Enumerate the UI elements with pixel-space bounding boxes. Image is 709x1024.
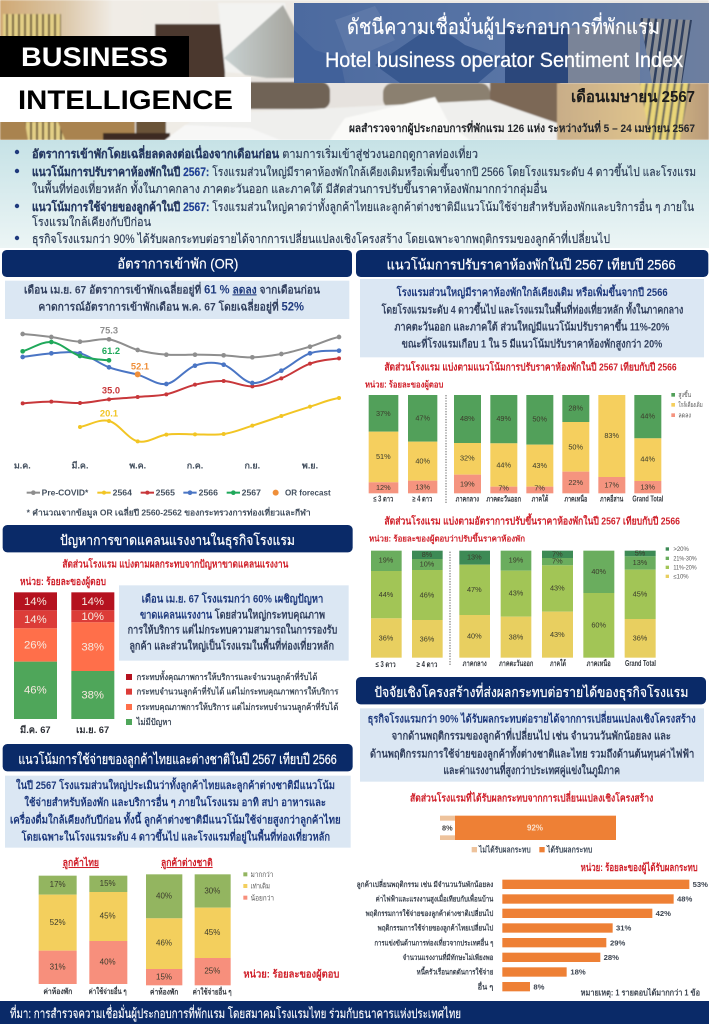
bar chart: structural factors: พฤติกรรมการใช้จ่ายของลูกค้าไทยเปลี่ยนไป (378, 922, 493, 934)
spending legend (243, 870, 274, 902)
stacked bars: increase rate: 45% (633, 589, 648, 598)
labor legend (126, 670, 338, 728)
room price summary box (360, 279, 704, 357)
stacked bars: spending: 40% (100, 958, 116, 967)
OR summary box (5, 281, 349, 319)
rate legend (666, 547, 697, 580)
impact legend: ไม่ได้รับผลกระทบ (478, 845, 531, 855)
stacked bars: increase rate: 10% (420, 560, 435, 569)
stacked bars: increase rate: 40% (591, 567, 606, 576)
x axis months: มี.ค. (71, 461, 88, 471)
stacked bars: price trend: ≥ 4 ดาว (412, 495, 433, 504)
stacked bars: increase rate: 38% (509, 632, 524, 641)
label: foreign customers: ลูกค้าต่างชาติ (161, 857, 213, 870)
heading: OR: อัตราการเข้าพัก (OR) (117, 256, 238, 272)
stacked bars: price trend: 44% (640, 411, 655, 420)
stacked bars: price trend: 49% (496, 414, 511, 423)
stacked bars: labor shortage: 14% (24, 596, 47, 608)
line chart: occupancy by year: 52.1 (131, 362, 149, 372)
label: Thai customers: ลูกค้าไทย (63, 856, 99, 870)
price trend legend (671, 390, 703, 419)
stacked bars: spending: 25% (204, 967, 220, 976)
stacked bars: price trend: 50% (568, 442, 583, 451)
structural summary box: และค่าแรงงานที่สูงกว่าประเทศคู่แข่งในภูมิภาค (443, 762, 620, 778)
footer source: ที่มา: การสำรวจความเชื่อมั่นผู้ประกอบการที่พักแรม โดยสมาคมโรงแรมไทย ร่วมกับธนาคารแห่งประเทศไทย (10, 1005, 461, 1022)
header title panel: Hotel business operator Sentiment Index (325, 49, 683, 72)
stacked bars: increase rate: 36% (379, 633, 394, 642)
heading: room price: แนวโน้มการปรับราคาห้องพักในปี 2567 เทียบปี 2566 (387, 256, 676, 272)
spending legend: เท่าเดิม (251, 882, 270, 891)
stacked bars: increase rate: 13% (467, 552, 482, 561)
OR footnote: * คำนวณจากข้อมูล OR เฉลี่ยปี 2560-2562 ของกระทรวงการท่องเที่ยวและกีฬา (27, 506, 311, 519)
stacked bars: labor shortage: 46% (24, 684, 47, 696)
OR legend: 2566 (199, 488, 218, 498)
x axis months: ก.ค. (187, 461, 203, 471)
stacked bars: increase rate: 8% (422, 550, 433, 559)
stacked bar: 8% vs 92%: 92% (527, 823, 543, 832)
bar chart: structural factors: ค่าไฟฟ้าและแรงงานสูงเมื่อเทียบกับเพื่อนบ้าน (376, 893, 494, 905)
spending summary box: ใช้จ่ายสำหรับห้องพัก และบริการอื่น ๆ ภายในโรงแรม อาทิ สปา อาหารและ (24, 794, 326, 809)
rate legend: 11%-20% (673, 565, 697, 571)
x axis months (14, 461, 318, 471)
bar chart: structural factors: 18% (570, 968, 586, 977)
stacked bars: labor shortage: 14% (81, 596, 104, 608)
key points summary: โรงแรมใกล้เคียงกับปีก่อน (32, 215, 151, 229)
stacked bars: increase rate: ≤ 3 ดาว (376, 660, 396, 669)
stacked bars: spending: 46% (156, 939, 172, 948)
bar chart: structural factors: ลูกค้าเปลี่ยนพฤติกรรม เช่น มีจำนวนวันพักน้อยลง (357, 878, 494, 890)
bar chart: structural factors: จำนวนแรงงานที่มีทักษะไม่เพียงพอ (403, 951, 494, 962)
bar chart: structural factors: อื่น ๆ (477, 980, 493, 991)
stacked bars: spending: ค่าห้องพัก (43, 986, 72, 996)
bar chart: structural factors: 53% (693, 880, 708, 889)
spending summary box: โดยเฉพาะในโรงแรมระดับ 4 ดาวขึ้นไป และโรงแรมที่อยู่ในพื้นที่ท่องเที่ยวหลัก (21, 828, 330, 844)
key points summary: ธุรกิจโรงแรมกว่า 90% ได้รับผลกระทบต่อรายได้จากการเปลี่ยนแปลงเชิงโครงสร้าง โดยเฉพาะจากพฤติกรรมของลูกค้าที่เปลี่ยนไป (32, 230, 610, 247)
stacked bars: increase rate: 7% (552, 550, 563, 559)
OR legend: 2564 (113, 488, 132, 498)
stacked bars: price trend: 44% (496, 460, 511, 469)
stacked bars: price trend: 13% (415, 482, 430, 491)
bar chart: structural factors: หนี้ครัวเรือนกดดันการใช้จ่าย (417, 966, 493, 977)
bar chart: structural factors: 48% (677, 895, 693, 904)
x axis months: พ.ย. (302, 461, 318, 471)
panel: occupancy rate (2, 250, 352, 519)
stacked bars: spending: 30% (204, 886, 220, 895)
stacked bars: price trend: 48% (460, 414, 475, 423)
stacked bars: price trend: ภาคกลาง (456, 495, 479, 504)
labor callout: ลูกค้า และส่วนใหญ่เป็นโรงแรมในพื้นที่ท่องเที่ยวหลัก (129, 637, 334, 653)
stacked bars: labor shortage: 26% (24, 639, 47, 651)
Business Intelligence logo: INTELLIGENCE (18, 85, 233, 115)
stacked bars: increase rate: ภาคเหนือ (587, 658, 611, 668)
stacked bars: increase rate: 19% (379, 556, 394, 565)
stacked bars: price trend: 13% (640, 483, 655, 492)
stacked bars: increase rate (371, 548, 656, 669)
Business Intelligence logo (0, 36, 251, 122)
stacked bars: price trend: 28% (568, 404, 583, 413)
stacked bars: price trend: 43% (532, 461, 547, 470)
labor callout: การให้บริการ แต่ไม่กระทบความสามารถในการรองรับ (128, 623, 337, 637)
stacked bars: price trend: 7% (534, 484, 545, 493)
bar chart: structural factors: การแข่งขันด้านการท่องเที่ยวจากประเทศอื่น ๆ (374, 936, 493, 947)
stacked bars: spending: ค่าใช้จ่ายอื่น ๆ (89, 985, 127, 996)
bar chart: structural factors (357, 878, 708, 991)
spending summary box: ในปี 2567 โรงแรมส่วนใหญ่ประเมินว่าทั้งลูกค้าไทยและลูกค้าต่างชาติมีแนวโน้ม (16, 777, 335, 793)
stacked bars: price trend: 47% (415, 414, 430, 423)
bar chart: structural factors: 42% (656, 909, 671, 918)
room price summary box: โรงแรมส่วนใหญ่มีราคาห้องพักใกล้เคียงเดิม หรือเพิ่มขึ้นจากปี 2566 (396, 284, 668, 299)
stacked bars: price trend: ภาคเหนือ (564, 494, 587, 504)
stacked bars: labor shortage: เม.ย. 67 (76, 725, 109, 735)
stacked bar: 8% vs 92% (440, 816, 616, 840)
heading: spending (3, 744, 353, 771)
line chart: occupancy by year (20, 325, 341, 443)
labor unit: หน่วย: ร้อยละของผู้ตอบ (20, 576, 106, 589)
stacked bars: price trend: 19% (460, 479, 475, 488)
OR summary box: เดือน เม.ย. 67 อัตราการเข้าพักเฉลี่ยอยู่ที่ 61 % ลดลง จากเดือนก่อน (24, 281, 320, 297)
spending summary box (5, 776, 351, 848)
stacked bars: price trend: 12% (376, 483, 391, 492)
heading: structural factors (356, 677, 706, 704)
x axis months: ม.ค. (14, 461, 31, 471)
stacked bars: price trend: ภาคอีสาน (600, 494, 624, 504)
stacked bars: increase rate: 19% (509, 555, 524, 564)
stacked bars: price trend: 17% (604, 480, 619, 489)
OR summary box: คาดการณ์อัตราการเข้าพักเดือน พ.ค. 67 โดยเฉลี่ยอยู่ที่ 52% (38, 299, 304, 315)
heading: spending: แนวโน้มการใช้จ่ายของลูกค้าไทยและต่างชาติในปี 2567 เทียบปี 2566 (18, 751, 337, 768)
labor legend: ไม่มีปัญหา (136, 716, 172, 728)
stacked bars: price trend: 22% (568, 478, 583, 487)
stacked bars: increase rate: 43% (509, 589, 524, 598)
panel: structural impact charts (357, 791, 708, 998)
x axis months: พ.ค. (129, 461, 146, 471)
impact legend (472, 845, 592, 855)
heading: labor shortage (3, 525, 353, 552)
stacked bars: increase rate: ≥ 4 ดาว (417, 660, 438, 669)
rate legend: ≤10% (673, 574, 689, 580)
impact legend: ได้รับผลกระทบ (546, 845, 592, 855)
bar chart: structural factors: พฤติกรรมการใช้จ่ายของลูกค้าต่างชาติเปลี่ยนไป (366, 907, 493, 919)
stacked bars: price trend: 32% (460, 454, 475, 463)
rate legend: 21%-30% (673, 556, 697, 562)
OR legend: 2565 (156, 488, 175, 498)
stacked bars: spending: 40% (156, 891, 172, 900)
panel: price increase rate (356, 512, 706, 782)
rate unit: หน่วย: ร้อยละของผู้ตอบว่าปรับขึ้นราคาห้องพัก (369, 532, 525, 545)
line chart: occupancy by year: 35.0 (102, 385, 120, 395)
stacked bars: increase rate: 44% (379, 590, 394, 599)
stacked bars: increase rate: 40% (467, 632, 482, 641)
labor callout: เดือน เม.ย. 67 โรงแรมกว่า 60% เผชิญปัญหา (142, 592, 323, 606)
x axis months: ก.ย. (244, 461, 260, 471)
stacked bars: increase rate: ภาคกลาง (463, 659, 487, 668)
stacked bars: price trend: Grand Total (632, 495, 663, 504)
OR legend: Pre-COVID* (42, 488, 89, 498)
stacked bars: price trend: 51% (376, 452, 391, 461)
heading: room price (356, 250, 708, 277)
stacked bars: spending: ค่าห้องพัก (150, 987, 178, 997)
heading: OR (2, 250, 352, 277)
spending legend: น้อยกว่า (251, 893, 274, 902)
room price summary box: ขณะที่โรงแรมเกือบ 1 ใน 5 มีแนวโน้มปรับราคาห้องพักสูงกว่า 20% (402, 336, 663, 352)
panel: customer spending (3, 744, 353, 997)
rate legend: >20% (673, 547, 689, 553)
stacked bars: labor shortage: มี.ค. 67 (20, 724, 51, 735)
stacked bars: increase rate: ภาคตะวันออก (499, 659, 533, 668)
stacked bars: price trend (369, 395, 663, 504)
room price unit: หน่วย: ร้อยละของผู้ตอบ (365, 380, 444, 391)
OR legend: OR forecast (285, 488, 331, 498)
labor legend: กระทบคุณภาพการให้บริการ แต่ไม่กระทบจำนวนลูกค้าที่รับได้ (137, 700, 338, 713)
stacked bars: increase rate: Grand Total (625, 659, 656, 668)
stacked bars: spending: 45% (100, 912, 116, 921)
panel: labor shortage (3, 525, 353, 735)
line chart: occupancy by year: 20.1 (100, 408, 118, 418)
OR legend: 2567 (242, 488, 261, 498)
stacked bars: price trend: ≤ 3 ดาว (373, 495, 394, 504)
stacked bars: spending: 17% (50, 880, 66, 889)
Business Intelligence logo: BUSINESS (21, 42, 168, 72)
stacked bars: price trend: ภาคใต้ (532, 494, 548, 504)
labor callout: ขาดแคลนแรงงาน โดยส่วนใหญ่กระทบคุณภาพ (140, 608, 325, 623)
spending legend: มากกว่า (251, 870, 273, 879)
heading: labor shortage: ปัญหาการขาดแคลนแรงงานในธุรกิจโรงแรม (60, 532, 295, 549)
stacked bars: price trend: 40% (415, 456, 430, 465)
stacked bars: price trend: 37% (376, 409, 391, 418)
stacked bars: increase rate: 7% (552, 557, 563, 566)
impact chart title: สัดส่วนโรงแรมที่ได้รับผลกระทบจากการเปลี่ยนแปลงเชิงโครงสร้าง (410, 791, 653, 805)
price trend legend: ลดลง (678, 412, 691, 419)
stacked bars: spending: 15% (156, 972, 172, 981)
stacked bars: increase rate: 43% (550, 630, 565, 639)
labor callout (119, 585, 349, 661)
stacked bars: spending: 45% (204, 928, 220, 937)
stacked bars: labor shortage: 10% (81, 611, 104, 623)
line chart: occupancy by year: 75.3 (100, 325, 118, 335)
key points summary (0, 140, 709, 248)
stacked bars: price trend: 50% (532, 415, 547, 424)
stacked bars: spending (39, 874, 232, 997)
stacked bars: increase rate: ภาคใต้ (550, 658, 566, 668)
stacked bars: increase rate: 13% (633, 558, 648, 567)
stacked bars: increase rate: 46% (420, 590, 435, 599)
stacked bars: spending: 52% (50, 918, 66, 927)
bar chart: structural factors: 31% (616, 924, 632, 933)
stacked bars: price trend: ภาคตะวันออก (486, 495, 521, 504)
stacked bars: labor shortage: 14% (24, 614, 47, 626)
stacked bars: labor shortage: 38% (81, 641, 104, 653)
header photo: hotel bed (0, 0, 709, 140)
stacked bar: 8% vs 92%: 8% (442, 823, 453, 832)
footer source (0, 1001, 709, 1024)
panel: room price trend (356, 250, 708, 504)
bar chart: structural factors: 8% (533, 982, 545, 991)
labor legend: กระทบจำนวนลูกค้าที่รับได้ แต่ไม่กระทบคุณภาพการให้บริการ (137, 685, 338, 698)
key points summary: อัตราการเข้าพักโดยเฉลี่ยลดลงต่อเนื่องจากเดือนก่อน ตามการเริ่มเข้าสู่ช่วงนอกฤดูกาลท่องเที่ยว (32, 145, 478, 162)
bar chart: structural factors: 29% (610, 938, 626, 947)
stacked bars: increase rate: 60% (591, 621, 606, 630)
structural summary box: จากด้านพฤติกรรมของลูกค้าที่เปลี่ยนไป เช่น จำนวนวันพักน้อยลง และ (392, 728, 671, 744)
OR legend (27, 488, 331, 498)
spending summary box: เครื่องดื่มใกล้เคียงกับปีก่อน ทั้งนี้ ลูกค้าต่างชาติมีแนวโน้มใช้จ่ายสูงกว่าลูกค้าไทย (10, 812, 341, 828)
stacked bars: price trend: 44% (640, 454, 655, 463)
labor legend: กระทบทั้งคุณภาพการให้บริการและจำนวนลูกค้าที่รับได้ (137, 670, 317, 683)
spending unit: หน่วย: ร้อยละของผู้ตอบ (243, 969, 340, 982)
stacked bars: spending: 15% (100, 879, 116, 888)
stacked bars: price trend: 7% (498, 484, 509, 493)
structural summary box (360, 708, 704, 782)
stacked bars: spending: 31% (50, 963, 66, 972)
header title panel (294, 3, 709, 83)
stacked bars: labor shortage: 38% (81, 689, 104, 701)
price trend legend: สูงขึ้น (678, 390, 691, 399)
stacked bars: increase rate: 36% (633, 633, 648, 642)
stacked bars: increase rate: 43% (550, 584, 565, 593)
date label: เดือนเมษายน 2567 (571, 88, 695, 106)
stacked bars: increase rate: 47% (467, 585, 482, 594)
line chart: occupancy by year: 61.2 (102, 346, 120, 356)
stacked bars: price trend: 83% (604, 431, 619, 440)
labor chart title: สัดส่วนโรงแรม แบ่งตามผลกระทบจากปัญหาขาดแคลนแรงงาน (62, 558, 289, 571)
stacked bars: increase rate: 36% (420, 634, 435, 643)
header title panel: ดัชนีความเชื่อมั่นผู้ประกอบการที่พักแรม (347, 12, 660, 40)
stacked bars: labor shortage (14, 592, 114, 735)
stacked bars: spending: ค่าใช้จ่ายอื่น ๆ (193, 986, 232, 997)
key points summary: ในพื้นที่ท่องเที่ยวหลัก ทั้งในภาคกลาง ภาคตะวันออก และภาคใต้ มีสัดส่วนการปรับขึ้นราคาห้องพักมากกว่ากลุ่มอื่น (32, 180, 547, 197)
bar chart: structural factors: 28% (604, 953, 619, 962)
stacked bars: increase rate: 5% (635, 548, 646, 557)
